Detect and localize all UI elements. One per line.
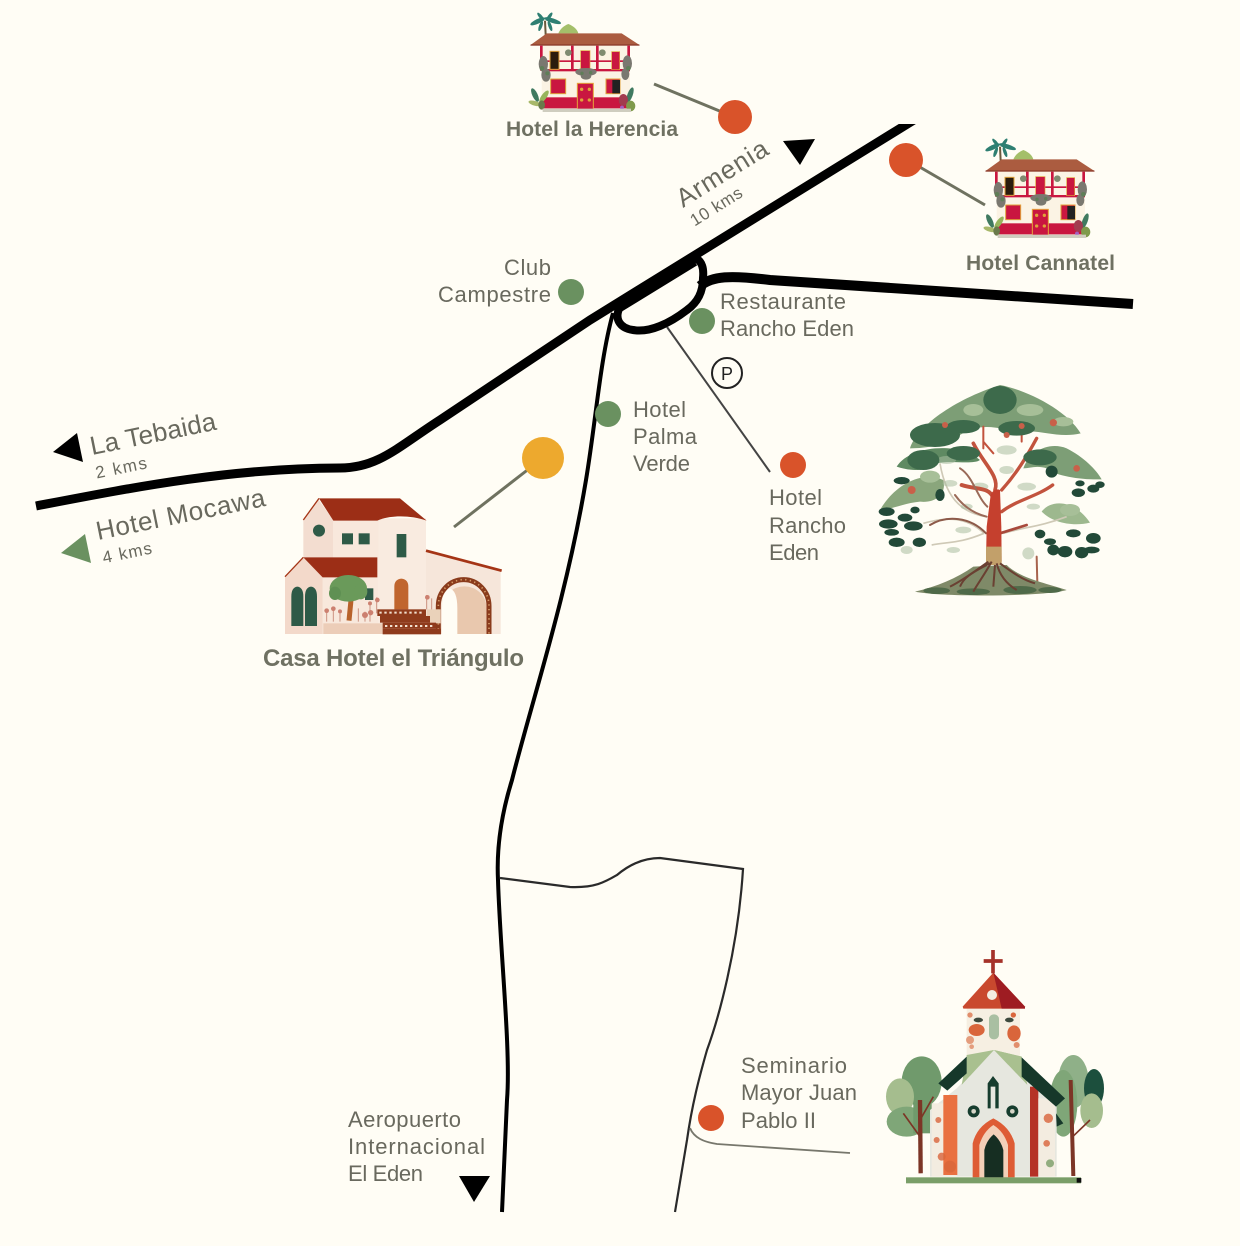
parking road [667, 327, 770, 472]
label: Club Campestre: Campestre [438, 282, 551, 307]
label: Armenia: Armenia [670, 133, 774, 213]
marker: Club Campestre [558, 279, 584, 305]
label: La Tebaida: La Tebaida [87, 406, 219, 461]
marker: Hotel Cannatel [889, 143, 923, 177]
seminary branch [690, 1128, 850, 1153]
arrow: Hotel Mocawa [61, 534, 91, 563]
label: Restaurante Rancho Eden [720, 289, 854, 341]
title: Casa Hotel el Triángulo: Casa Hotel el Triángulo [263, 645, 524, 672]
label: Hotel Mocawa: Hotel Mocawa [93, 482, 268, 546]
east road [700, 277, 1133, 304]
label: Aeropuerto: El Eden [348, 1161, 423, 1186]
label: Seminario: Pablo II [741, 1108, 816, 1133]
label: Hotel Rancho Eden: Hotel [769, 485, 822, 510]
label: Hotel Palma Verde [633, 397, 698, 476]
roundabout [618, 258, 703, 331]
south road [498, 313, 613, 1212]
connector: Casa Hotel [454, 468, 530, 527]
label: Club Campestre: Club [504, 255, 551, 280]
label: Hotel Palma Verde: Hotel [633, 397, 686, 422]
label: Seminario: Mayor Juan [741, 1080, 857, 1105]
icon: tree [879, 385, 1105, 595]
main road [36, 110, 930, 506]
arrow: La Tebaida [53, 433, 83, 462]
label: La Tebaida: 2 kms [94, 453, 149, 482]
label: La Tebaida [87, 406, 224, 482]
icon: Hotel Cannatel building [983, 138, 1095, 238]
label: Aeropuerto: Internacional [348, 1134, 485, 1159]
marker: Hotel Palma Verde [595, 401, 621, 427]
label: Hotel Mocawa: 4 kms [101, 539, 154, 567]
icon: Hotel la Herencia building [528, 12, 640, 112]
label: Restaurante Rancho Eden: Rancho Eden [720, 316, 854, 341]
label: Hotel Rancho Eden: Rancho [769, 513, 846, 538]
parking icon: P [721, 364, 733, 384]
marker: Casa Hotel [522, 437, 564, 479]
icon: church [886, 950, 1104, 1183]
marker: Restaurante Rancho Eden [689, 308, 715, 334]
label: Aeropuerto: Aeropuerto [348, 1107, 461, 1132]
icon: Casa Hotel el Triángulo building [285, 498, 502, 634]
label: Hotel Palma Verde: Palma [633, 424, 698, 449]
label: Restaurante Rancho Eden: Restaurante [720, 289, 846, 314]
connector: Hotel Cannatel [918, 166, 985, 205]
marker: Hotel la Herencia [718, 100, 752, 134]
title: Hotel la Herencia: Hotel la Herencia [506, 118, 678, 141]
marker: Hotel Rancho Eden [780, 452, 806, 478]
label: Armenia: 10 kms [687, 183, 746, 230]
label: Seminario: Seminario [741, 1053, 847, 1078]
label: Hotel Palma Verde: Verde [633, 451, 690, 476]
parking icon [712, 358, 742, 388]
label: Aeropuerto [348, 1107, 485, 1186]
road network [36, 110, 1133, 1212]
marker: Seminario [698, 1105, 724, 1131]
arrow: Aeropuerto [459, 1176, 490, 1202]
arrow: Armenia [783, 139, 815, 165]
label: Hotel Rancho Eden [769, 485, 846, 565]
label: Seminario [741, 1053, 857, 1133]
label: Hotel Rancho Eden: Eden [769, 540, 819, 565]
connector: Hotel la Herencia [654, 84, 722, 112]
label: Club Campestre [438, 255, 551, 307]
title: Hotel Cannatel: Hotel Cannatel [966, 252, 1115, 275]
airport side road [500, 858, 743, 1212]
